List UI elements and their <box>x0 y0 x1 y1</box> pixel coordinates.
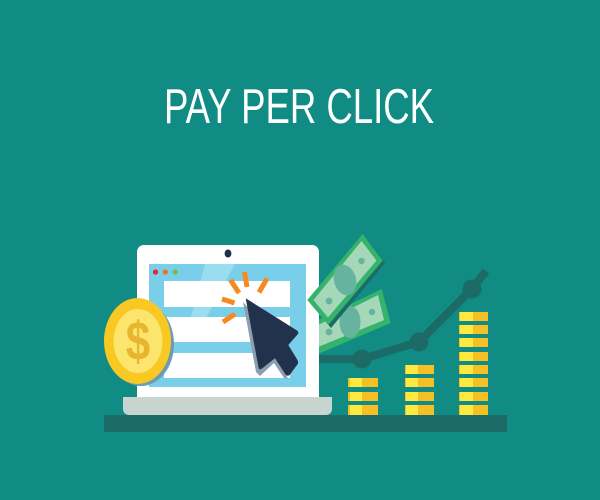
webcam <box>225 250 231 258</box>
browser window <box>149 264 306 387</box>
coin stack 2 <box>405 365 434 415</box>
title: PAY PER CLICK <box>164 80 434 134</box>
icon: click rays <box>222 272 267 322</box>
coin stack 1 <box>348 378 378 415</box>
icon: mouse cursor <box>243 298 298 379</box>
browser buttons <box>153 269 178 275</box>
form row 2 <box>164 317 290 342</box>
icon: gold dollar coin: $ <box>126 310 150 372</box>
icon: gold dollar coin <box>104 298 174 386</box>
form row 1 <box>164 281 290 307</box>
laptop screen frame <box>137 245 319 397</box>
form row 3 <box>164 353 290 378</box>
coin stack 3 <box>459 312 488 415</box>
laptop base <box>123 397 332 415</box>
ground bar <box>104 415 507 432</box>
icon: back banknote <box>318 289 391 354</box>
icon: front banknote <box>307 234 385 328</box>
laptop <box>123 245 332 415</box>
growth line chart <box>316 271 486 368</box>
